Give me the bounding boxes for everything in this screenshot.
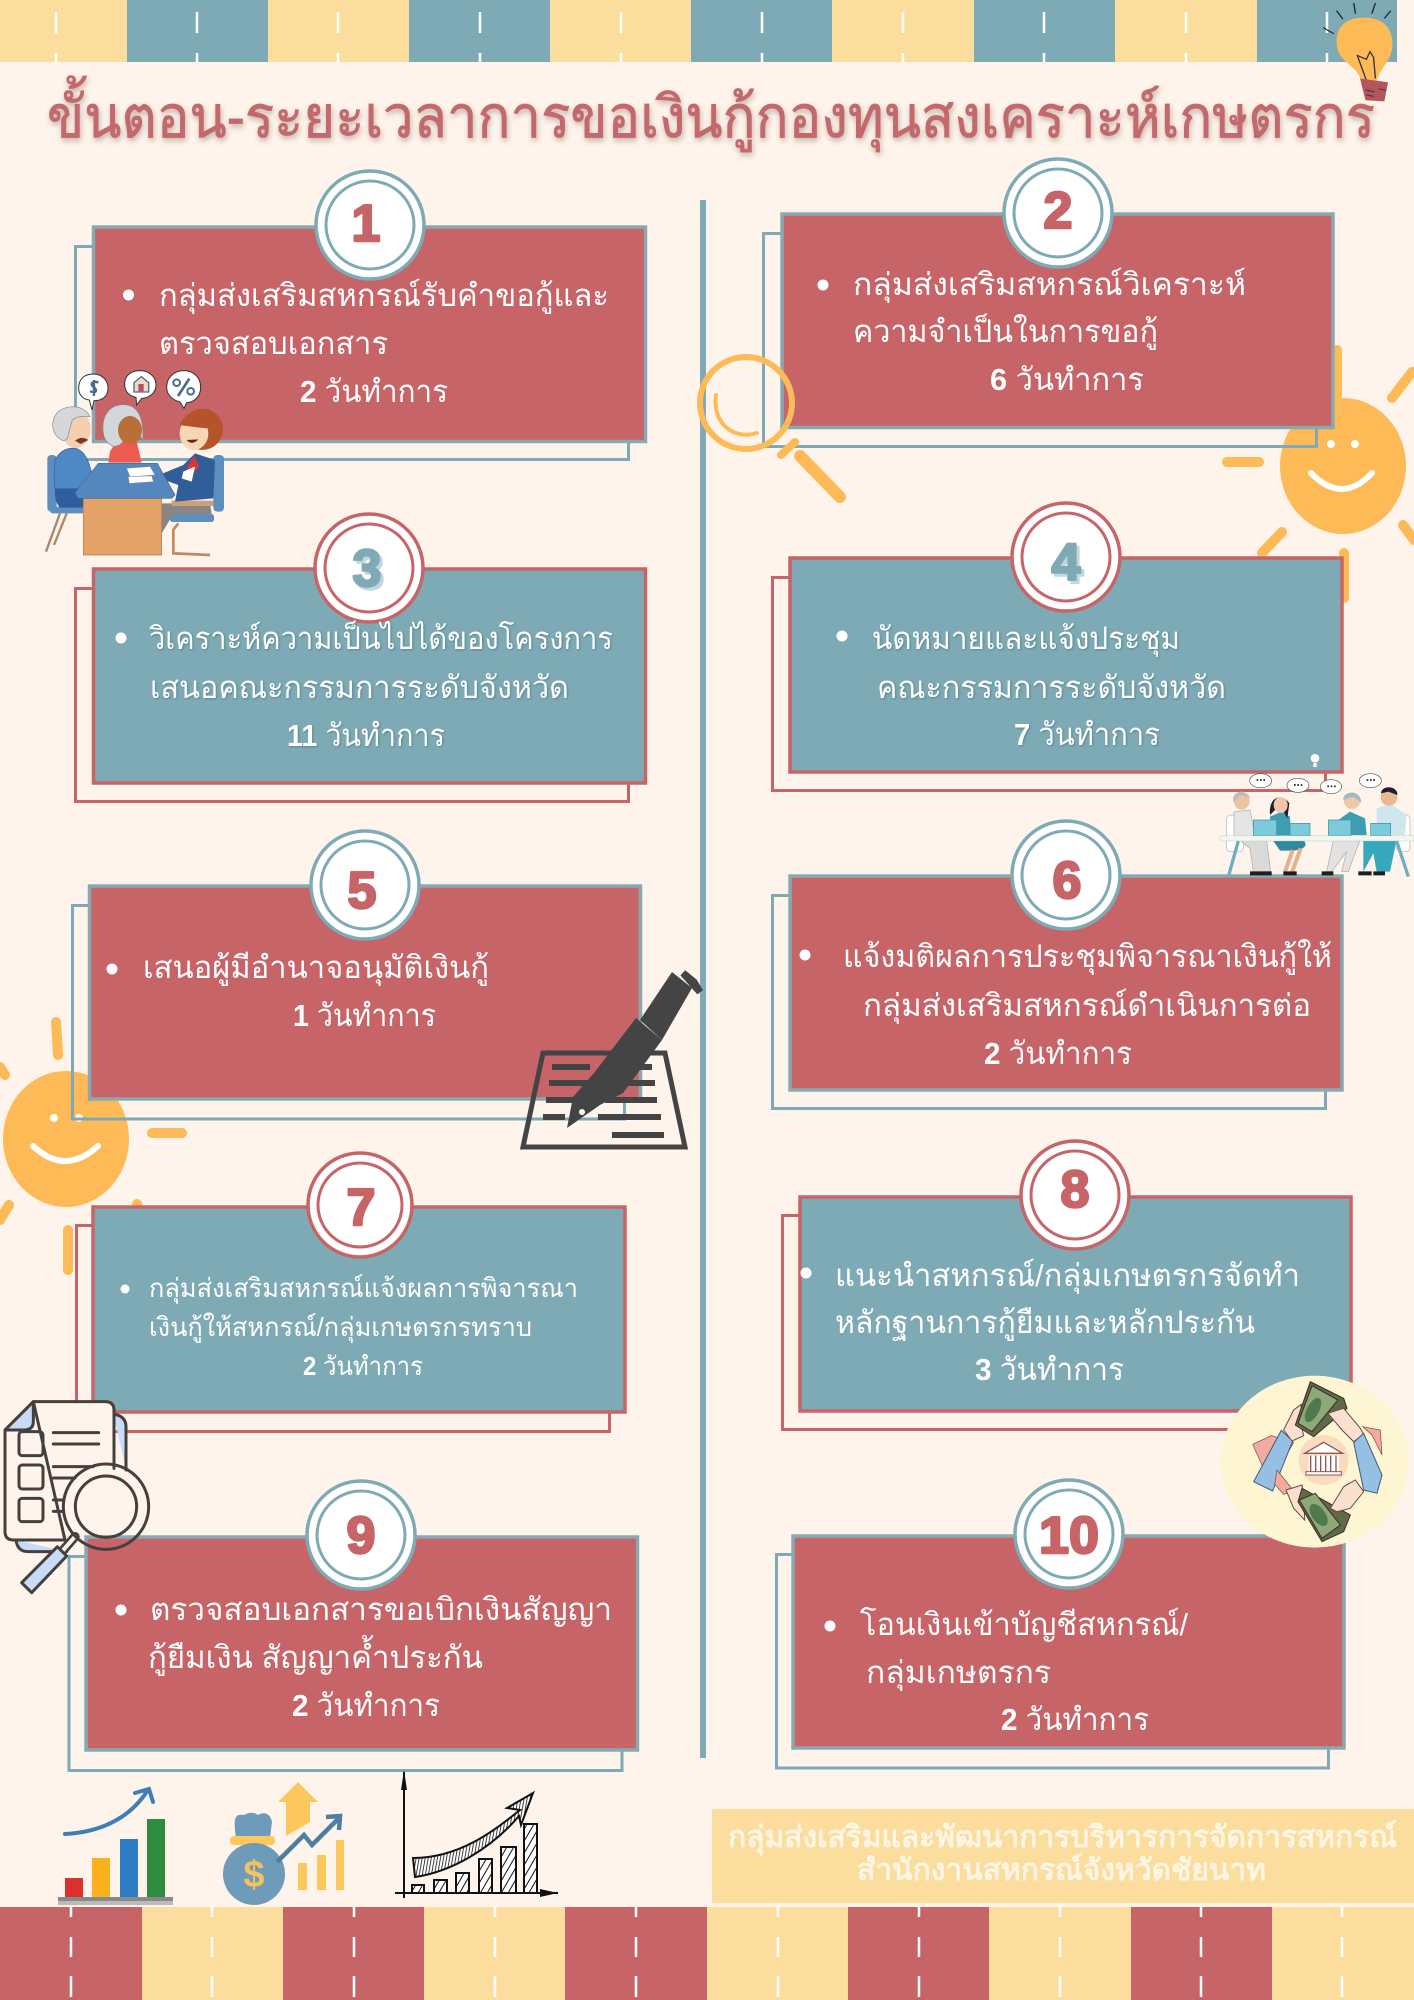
panel: step 3: 3 xyxy=(353,540,381,598)
panel: step 9: 2 วันทำการ xyxy=(292,1688,440,1723)
icon: meeting team xyxy=(1220,754,1414,877)
panel: step 3: วิเคราะห์ความเป็นไปได้ของโครงการ xyxy=(148,620,613,656)
icon: smiling sun right xyxy=(1227,350,1414,598)
panel: step 1: ตรวจสอบเอกสาร xyxy=(159,326,388,361)
panel: step 7: เงินกู้ให้สหกรณ์/กลุ่มเกษตรกรทราบ xyxy=(149,1312,532,1343)
panel: step 4: 7 วันทำการ xyxy=(1014,717,1160,752)
panel: step 3: เสนอคณะกรรมการระดับจังหวัด xyxy=(150,670,569,705)
panel: step 6: 2 วันทำการ xyxy=(984,1036,1132,1071)
panel: step 2: กลุ่มส่งเสริมสหกรณ์วิเคราะห์ xyxy=(853,267,1246,304)
panel: step 7: กลุ่มส่งเสริมสหกรณ์แจ้งผลการพิจารณา xyxy=(149,1273,578,1304)
icon: colourful bar chart xyxy=(58,1789,173,1905)
panel: step 10: กลุ่มเกษตรกร xyxy=(866,1655,1051,1692)
footer credit block: สำนักงานสหกรณ์จังหวัดชัยนาท xyxy=(857,1853,1266,1887)
panel: step 10 xyxy=(776,1480,1344,1768)
panel: step 9: กู้ยืมเงิน สัญญาค้ำประกัน xyxy=(148,1635,483,1676)
panel: step 6 xyxy=(772,821,1342,1108)
panel: step 3: 11 วันทำการ xyxy=(287,718,445,753)
panel: step 5 xyxy=(72,831,640,1119)
panel: step 10: โอนเงินเข้าบัญชีสหกรณ์/ xyxy=(860,1607,1188,1642)
icon: pen signing document xyxy=(523,972,700,1147)
panel: step 9 xyxy=(69,1481,638,1770)
icon: money bag with growth xyxy=(223,1782,344,1905)
panel: step 10: 2 วันทำการ xyxy=(1001,1702,1149,1737)
panel: step 1: กลุ่มส่งเสริมสหกรณ์รับคำขอกู้และ xyxy=(159,278,609,315)
footer credit block xyxy=(712,1809,1414,1903)
panel: step 5: เสนอผู้มีอำนาจอนุมัติเงินกู้ xyxy=(143,950,489,987)
panel: step 4: นัดหมายและแจ้งประชุม xyxy=(872,621,1180,658)
panel: step 10: 10 xyxy=(1039,1507,1099,1565)
panel: step 8: 8 xyxy=(1061,1161,1089,1219)
panel: step 7: 2 วันทำการ xyxy=(303,1351,423,1381)
center divider xyxy=(700,200,706,1758)
top stripe band xyxy=(0,0,1397,62)
panel: step 8 xyxy=(782,1141,1351,1430)
panel: step 1: 2 วันทำการ xyxy=(300,374,448,409)
panel: step 7 xyxy=(76,1153,625,1432)
panel: step 6: กลุ่มส่งเสริมสหกรณ์ดำเนินการต่อ xyxy=(863,988,1311,1025)
panel: step 8: แนะนำสหกรณ์/กลุ่มเกษตรกรจัดทำ xyxy=(835,1258,1300,1295)
icon: checklist with magnifier xyxy=(5,1402,149,1593)
icon: hands exchanging money around a bank xyxy=(1221,1376,1409,1548)
panel: step 7: 7 xyxy=(347,1179,375,1237)
panel: step 2: 6 วันทำการ xyxy=(990,362,1144,397)
panel: step 8: 3 วันทำการ xyxy=(975,1352,1124,1387)
bottom stripe band xyxy=(0,1907,1414,2000)
panel: step 8: หลักฐานการกู้ยืมและหลักประกัน xyxy=(835,1305,1255,1341)
panel: step 4: คณะกรรมการระดับจังหวัด xyxy=(877,670,1226,705)
icon: smiling sun left xyxy=(0,1022,182,1270)
icon: people at a loan desk xyxy=(46,371,224,555)
icon: sketched growth chart xyxy=(395,1770,558,1898)
panel: step 9: 9 xyxy=(347,1507,375,1565)
icon: orange magnifier xyxy=(700,357,840,497)
panel: step 2 xyxy=(764,159,1333,446)
panel: step 3 xyxy=(76,514,646,802)
footer credit block: กลุ่มส่งเสริมและพัฒนาการบริหารการจัดการสหกรณ์ xyxy=(728,1820,1397,1856)
panel: step 6: 6 xyxy=(1053,852,1081,910)
panel: step 2: 2 xyxy=(1044,182,1072,240)
panel: step 6: แจ้งมติผลการประชุมพิจารณาเงินกู้ให้ xyxy=(843,939,1332,976)
panel: step 2: ความจำเป็นในการขอกู้ xyxy=(853,313,1158,350)
icon: money bag with growth: $ xyxy=(243,1854,265,1896)
panel: step 4 xyxy=(772,503,1342,790)
panel: step 5: 5 xyxy=(348,862,376,920)
panel: step 5: 1 วันทำการ xyxy=(293,998,436,1033)
panel: step 1 xyxy=(76,171,646,460)
panel: step 1: 1 xyxy=(352,195,380,253)
panel: step 9: ตรวจสอบเอกสารขอเบิกเงินสัญญา xyxy=(150,1592,612,1627)
panel: step 4: 4 xyxy=(1052,534,1081,592)
icon: light bulb xyxy=(1323,3,1393,101)
